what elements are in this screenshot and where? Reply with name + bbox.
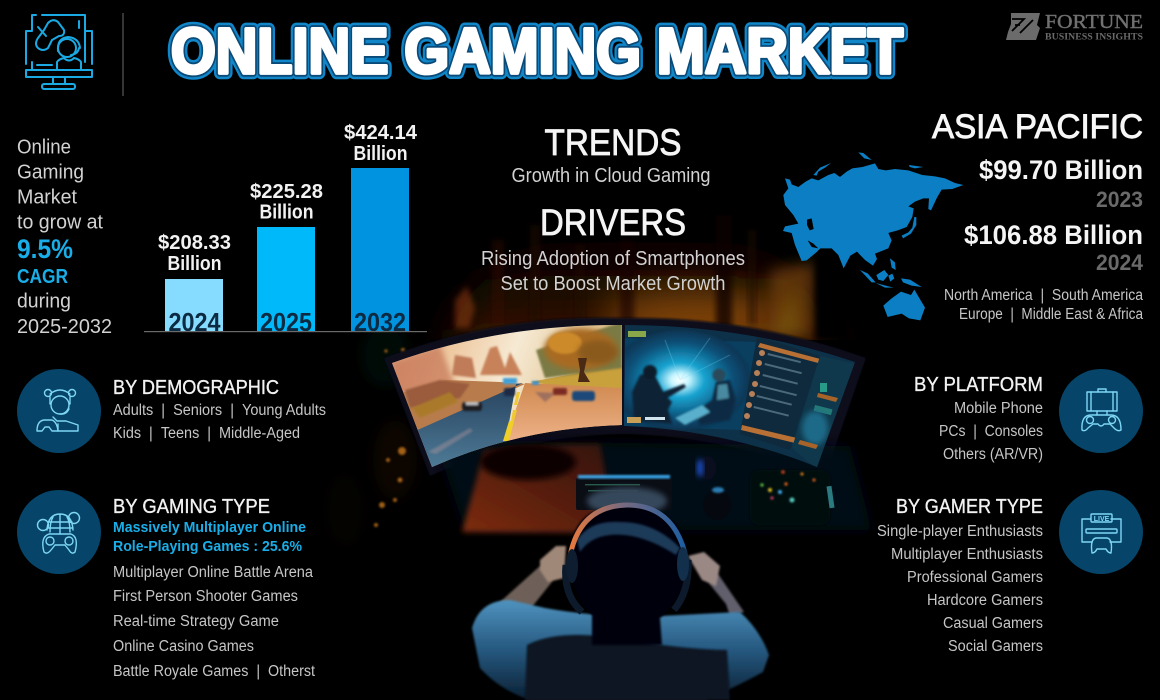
chair back [525, 635, 730, 700]
left monitor: racing game [392, 325, 622, 467]
bar 2024: Billion [168, 253, 222, 275]
icon: gamer with controller [17, 369, 101, 453]
trends [512, 122, 710, 187]
plants [327, 323, 417, 545]
panel: by gaming type [17, 490, 316, 680]
panel: by gamer type: Single-player Enthusiasts [877, 523, 1043, 540]
CAGR statement: to grow at [17, 212, 103, 234]
panel: by gamer type: Multiplayer Enthusiasts [891, 546, 1043, 563]
head [571, 505, 687, 645]
panel: by gamer type [877, 490, 1143, 655]
panel: by platform: PCs | Consoles [939, 423, 1043, 440]
CAGR statement: CAGR [17, 266, 68, 288]
CAGR statement: Market [17, 186, 77, 208]
bar 2025: 2025 [260, 307, 312, 337]
desk mat [462, 444, 616, 533]
panel: by gaming type: Real-time Strategy Game [113, 613, 279, 630]
panel: by gaming type: Battle Royale Games | Otherst [113, 663, 316, 680]
gamer with headphones [472, 487, 769, 700]
panel: by gamer type: BY GAMER TYPE [896, 496, 1043, 518]
panel: by demographic: BY DEMOGRAPHIC [113, 377, 279, 399]
bar 2024: 2024 [168, 307, 221, 337]
keyboard [576, 475, 672, 510]
hair [587, 487, 667, 515]
right seated figure [675, 368, 736, 425]
right side ember glow [770, 262, 815, 335]
panel: by gaming type: BY GAMING TYPE [113, 496, 270, 518]
headphone band [570, 505, 685, 556]
background scene: gaming room [366, 216, 874, 700]
title: ONLINE GAMING MARKET [171, 15, 903, 87]
Asia Pacific statistics: 2024 [1096, 250, 1144, 275]
panel: by demographic [17, 369, 326, 453]
panel: by platform: Others (AR/VR) [943, 446, 1043, 463]
icon: phone mounted on controller [1059, 369, 1143, 453]
controller glyph [36, 20, 64, 50]
logo: Fortune Business Insights: FORTUNE [1045, 12, 1143, 33]
title: ONLINE GAMING MARKET [171, 15, 903, 87]
logo: Fortune Business Insights [1006, 12, 1143, 42]
Asia Pacific statistics [932, 108, 1144, 323]
CAGR statement [17, 136, 112, 338]
trends: Growth in Cloud Gaming [512, 165, 710, 187]
bar chart: market size [144, 122, 427, 337]
CAGR statement: Gaming [17, 162, 84, 184]
headset person glyph [58, 39, 76, 57]
panel: by gaming type: Multiplayer Online Battle Arena [113, 564, 313, 581]
bar 2024: $208.33 [158, 232, 231, 254]
panel: by gamer type: Professional Gamers [907, 569, 1043, 586]
Asia Pacific statistics: $106.88 Billion [964, 220, 1143, 250]
CAGR statement: during [17, 290, 71, 312]
Asia Pacific statistics: ASIA PACIFIC [932, 108, 1143, 146]
panel: by gamer type: Hardcore Gamers [927, 592, 1043, 609]
left seated figure [632, 365, 686, 424]
trends: TRENDS [544, 122, 682, 163]
bar 2032: Billion [354, 143, 408, 165]
chat panel [740, 336, 820, 450]
header divider [122, 13, 124, 96]
map: Asia Pacific [783, 152, 963, 320]
panel: by gamer type: Social Gamers [948, 638, 1043, 655]
panel: by gaming type: Online Casino Games [113, 638, 254, 655]
drivers: DRIVERS [540, 202, 686, 243]
Asia Pacific statistics: 2023 [1096, 187, 1143, 212]
CAGR statement: 9.5% [17, 234, 73, 264]
icon: globe with controller [17, 490, 101, 574]
panel: by gaming type: Role-Playing Games : 25.6% [113, 538, 302, 555]
Asia Pacific statistics: $99.70 Billion [979, 155, 1143, 185]
desk mouse pad shadow [480, 444, 576, 480]
logo: Fortune Business Insights: BUSINESS INSIGHTS [1045, 32, 1143, 42]
panel: by gaming type: First Person Shooter Games [113, 588, 298, 605]
bar 2032 [344, 122, 418, 337]
panel: by demographic: Kids | Teens | Middle-Aged [113, 425, 300, 442]
drivers: Rising Adoption of Smartphones [481, 248, 745, 270]
bar 2025 [250, 181, 323, 337]
forearms and hands [500, 546, 744, 616]
panel: by gamer type: Casual Gamers [943, 615, 1043, 632]
bar 2032: 2032 [354, 307, 406, 337]
icon: live stream with controller [1059, 490, 1143, 574]
shirt [472, 600, 769, 700]
desk [435, 440, 872, 530]
panel: by platform: BY PLATFORM [914, 374, 1043, 396]
desk gadgets [697, 456, 835, 525]
right monitor: stream with chat [624, 325, 855, 467]
Asia Pacific statistics: North America | South America [944, 287, 1143, 304]
drivers: Set to Boost Market Growth [500, 273, 726, 295]
panel: by demographic: Adults | Seniors | Young Adults [113, 402, 326, 419]
bar 2024 [158, 232, 231, 337]
bar 2025: $225.28 [250, 181, 323, 203]
CAGR statement: Online [17, 136, 71, 158]
CAGR statement: 2025-2032 [17, 316, 112, 338]
icon: live stream with controller: LIVE [1094, 516, 1110, 523]
panel: by platform: Mobile Phone [954, 400, 1043, 417]
bar 2032: $424.14 [344, 122, 418, 144]
title: ONLINE GAMING MARKET [171, 15, 903, 87]
panel: by gaming type: Massively Multiplayer Online [113, 519, 306, 536]
room window glow [436, 216, 832, 340]
bar 2025: Billion [260, 202, 314, 224]
panel: by platform [914, 369, 1143, 463]
monitor bezel [384, 318, 866, 476]
header icon: monitor with gamer [26, 15, 92, 89]
drivers [481, 202, 745, 295]
